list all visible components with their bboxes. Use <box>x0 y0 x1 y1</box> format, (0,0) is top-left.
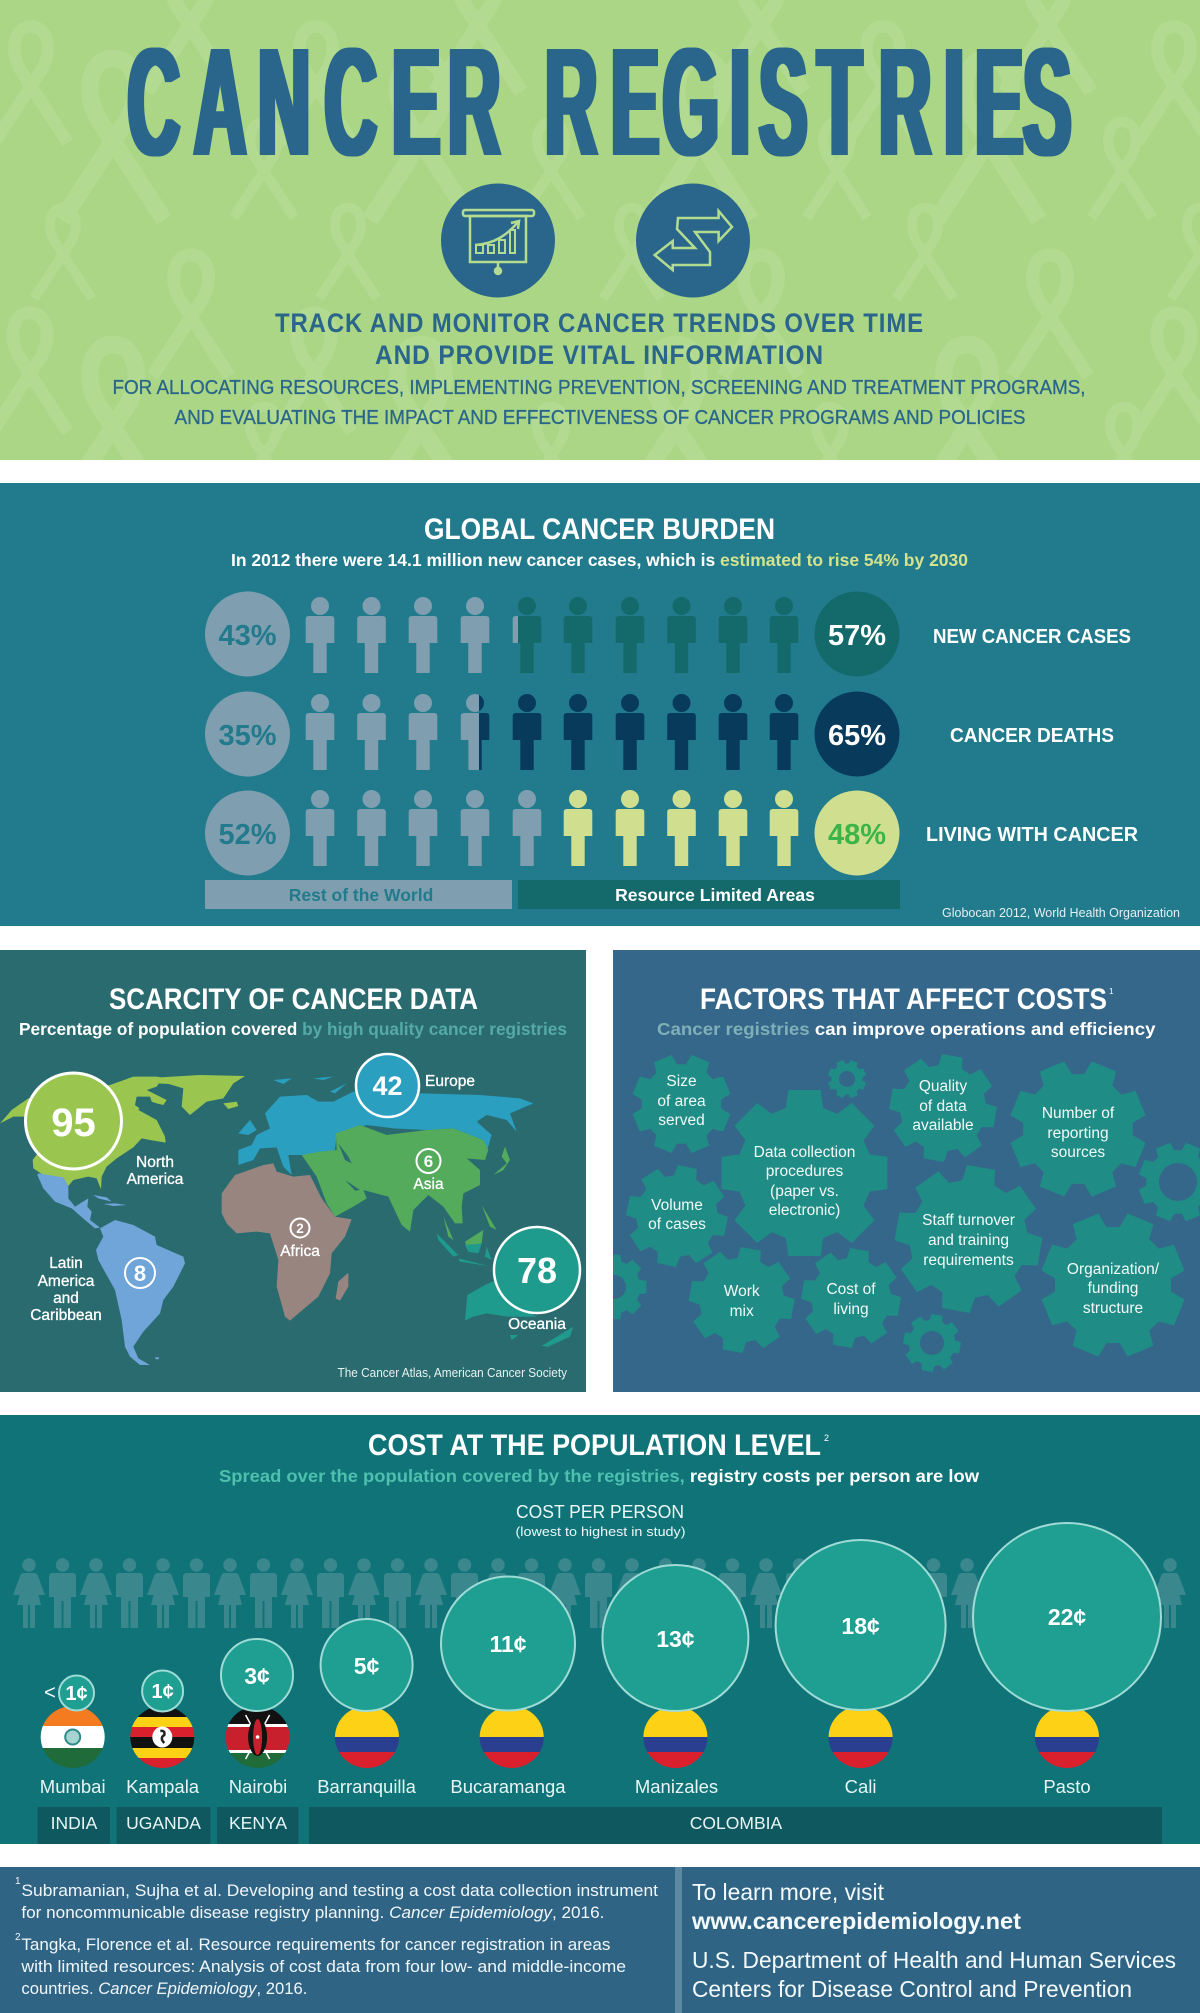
gear label: data collection procedures: procedures <box>766 1163 844 1180</box>
row: living with cancer: LIVING WITH CANCER <box>926 824 1139 846</box>
gear label: organization funding structure: funding <box>1088 1280 1138 1297</box>
bubble: manizales 13 cents <box>602 1565 748 1711</box>
row: new cancer cases: 43% <box>218 620 277 652</box>
bubble: north america 95: 95 <box>51 1101 96 1145</box>
heading: SCARCITY OF CANCER DATA <box>109 983 478 1016</box>
website: www.cancerepidemiology.net <box>691 1908 1021 1934</box>
city labels: Barranquilla <box>317 1776 417 1797</box>
gear label: number of reporting sources <box>1042 1105 1115 1161</box>
map: asia <box>302 1125 510 1247</box>
row: living with cancer: 48% <box>828 819 886 851</box>
bubble: latin america 8: 8 <box>134 1261 146 1286</box>
bubble: asia 6: Asia <box>413 1176 444 1193</box>
agency <box>692 1947 1176 2002</box>
flag: colombia, barranquilla <box>335 1710 399 1768</box>
gear label: quality of data available: of data <box>919 1098 967 1115</box>
legend: resource limited areas: Resource Limited Areas <box>615 885 815 905</box>
bubble: africa 2: Africa <box>280 1243 320 1260</box>
map: north america <box>0 1075 245 1189</box>
bubble: latin america 8 <box>30 1255 155 1324</box>
subheading: In 2012 there were 14.1 million new cancer cases, which is estimated to rise 54% by 2030 <box>231 550 968 570</box>
city labels: Pasto <box>1043 1776 1091 1797</box>
gear label: size of area served: of area <box>657 1093 706 1110</box>
country bar: colombia <box>309 1807 1162 1844</box>
gear label: volume of cases: of cases <box>648 1216 706 1233</box>
map: africa <box>222 1163 352 1321</box>
gear label: staff turnover: Staff turnover <box>922 1212 1015 1229</box>
bubble: asia 6: 6 <box>424 1152 433 1171</box>
row: living with cancer <box>205 790 1139 876</box>
bubble: barranquilla 5 cents: 5¢ <box>354 1653 380 1679</box>
country bar: kenya <box>217 1807 298 1844</box>
gear label: number of reporting sources: sources <box>1051 1144 1105 1161</box>
row: cancer deaths: 35% <box>218 720 277 752</box>
bubble: nairobi 3 cents <box>221 1639 293 1711</box>
bubble: asia 6 <box>413 1149 444 1193</box>
gear label: organization funding structure: structure <box>1083 1300 1143 1317</box>
flag: colombia, cali <box>828 1710 893 1768</box>
panel: cost at the population level <box>0 1415 1200 1844</box>
footnote marker: 1 <box>1109 987 1114 996</box>
gear label: staff turnover: requirements <box>923 1252 1014 1269</box>
bubble: africa 2: 2 <box>296 1221 304 1236</box>
world map: americas <box>0 1075 245 1365</box>
headline: AND PROVIDE VITAL INFORMATION <box>375 340 824 370</box>
gear label: size of area served: served <box>658 1112 705 1129</box>
row: cancer deaths: 65% <box>828 720 886 752</box>
gear label: data collection procedures: Data collection <box>754 1144 855 1161</box>
city labels: Kampala <box>126 1776 200 1797</box>
panel: footer references <box>0 1867 675 2013</box>
panel: footer contact: To learn more, visit <box>692 1879 885 1905</box>
bubble: latin america 8: America <box>38 1273 95 1290</box>
bubble: kampala 1 cent: 1¢ <box>151 1681 174 1703</box>
country bar: india <box>38 1807 110 1844</box>
bubble: europe 42: Europe <box>425 1073 475 1090</box>
bubble: latin america 8: Latin <box>49 1255 83 1272</box>
country bar: uganda <box>117 1807 210 1844</box>
gear label: number of reporting sources: reporting <box>1047 1125 1109 1142</box>
city labels: Bucaramanga <box>450 1776 566 1797</box>
bubble: oceania 78 <box>494 1227 580 1333</box>
bubble: africa 2 <box>280 1218 320 1260</box>
gear label: work mix: Work <box>724 1283 760 1300</box>
panel: factors that affect costs <box>582 950 1200 1392</box>
city labels: Mumbai <box>40 1776 106 1797</box>
bubble: oceania 78: Oceania <box>508 1316 566 1333</box>
panel: scarcity of cancer data <box>0 950 586 1392</box>
population silhouettes <box>13 1558 1186 1628</box>
bubble: mumbai less than 1 cent: 1¢ <box>65 1683 88 1705</box>
gear label: data collection procedures: (paper vs. <box>770 1183 839 1200</box>
chart label: COST PER PERSON <box>516 1501 684 1522</box>
bubble: cali 18 cents <box>776 1540 946 1710</box>
header description <box>112 377 1086 429</box>
bubble: bucaramanga 11 cents: 11¢ <box>489 1631 527 1657</box>
bubble: pasto 22 cents: 22¢ <box>1048 1604 1086 1630</box>
gear label: size of area served: Size <box>666 1073 697 1090</box>
chart label: (lowest to highest in study) <box>516 1524 686 1539</box>
map: oceania <box>437 1233 573 1347</box>
gear label: staff turnover: and training <box>928 1232 1009 1249</box>
icon: presentation chart <box>441 184 555 298</box>
subheading: Cancer registries can improve operations and efficiency <box>657 1019 1156 1039</box>
ribbon background pattern <box>0 0 1200 506</box>
bubble: north america 95: North <box>136 1154 174 1171</box>
reference 2 <box>15 1932 626 1998</box>
reference 1 <box>15 1876 658 1922</box>
agency: U.S. Department of Health and Human Services <box>692 1947 1176 1973</box>
headline: TRACK AND MONITOR CANCER TRENDS OVER TIME <box>275 308 924 338</box>
header description: AND EVALUATING THE IMPACT AND EFFECTIVENESS OF CANCER PROGRAMS AND POLICIES <box>174 407 1026 429</box>
subheading: Percentage of population covered by high quality cancer registries <box>19 1019 567 1039</box>
gear label: volume of cases: Volume <box>651 1197 703 1214</box>
flag: colombia, bucaramanga <box>479 1705 545 1769</box>
country bar: uganda: UGANDA <box>126 1813 201 1833</box>
gear label: quality of data available <box>912 1078 974 1134</box>
gear label: quality of data available: available <box>912 1117 974 1134</box>
footnote marker: 2 <box>824 1433 829 1443</box>
bubble: bucaramanga 11 cents <box>441 1576 575 1710</box>
gear label: quality of data available: Quality <box>919 1078 967 1095</box>
bubble: latin america 8: Caribbean <box>30 1307 102 1324</box>
bubble: mumbai less than 1 cent: < <box>44 1682 56 1704</box>
bubble: mumbai less than 1 cent <box>44 1676 94 1710</box>
flag: uganda <box>129 1705 195 1769</box>
heading: FACTORS THAT AFFECT COSTS <box>700 983 1107 1016</box>
header description: FOR ALLOCATING RESOURCES, IMPLEMENTING PREVENTION, SCREENING AND TREATMENT PROGRAMS, <box>112 377 1086 399</box>
bubble: oceania 78: 78 <box>517 1250 557 1291</box>
bubble: pasto 22 cents <box>973 1523 1161 1711</box>
bubble: manizales 13 cents: 13¢ <box>656 1626 695 1652</box>
gear label: volume of cases <box>648 1197 706 1233</box>
map: latin america <box>37 1173 185 1365</box>
bubble: north america 95: America <box>127 1171 184 1188</box>
gear label: size of area served <box>657 1073 706 1129</box>
row: cancer deaths <box>205 692 1114 776</box>
reference 1: for noncommunicable disease registry planning. Cancer Epidemiology , 2016. <box>21 1904 604 1922</box>
bubble: cali 18 cents: 18¢ <box>841 1613 880 1639</box>
gear label: cost of living: living <box>833 1301 869 1318</box>
flag: colombia, pasto <box>1035 1710 1099 1768</box>
row: cancer deaths: CANCER DEATHS <box>950 725 1114 747</box>
reference 2: 2 <box>15 1932 21 1943</box>
bubble: kampala 1 cent <box>142 1670 183 1712</box>
source: Globocan 2012, World Health Organization <box>942 905 1180 920</box>
gears <box>613 1054 1200 1372</box>
legend: resource limited areas <box>518 880 900 909</box>
country bar: kenya: KENYA <box>229 1813 287 1833</box>
reference 2: with limited resources: Analysis of cost data from four low- and middle-income <box>20 1958 626 1976</box>
title: CANCER <box>128 17 500 188</box>
reference 2: countries. Cancer Epidemiology, 2016. <box>21 1980 307 1998</box>
heading: COST AT THE POPULATION LEVEL <box>368 1429 821 1462</box>
reference 1: 1 <box>15 1876 21 1887</box>
city labels <box>40 1776 1091 1797</box>
source: The Cancer Atlas, American Cancer Society <box>338 1365 567 1380</box>
panel: footer contact <box>675 1867 1200 2013</box>
reference 2: Tangka, Florence et al. Resource requirements for cancer registration in areas <box>21 1936 610 1954</box>
row: new cancer cases: 57% <box>828 620 886 652</box>
heading: GLOBAL CANCER BURDEN <box>424 513 775 546</box>
icon: exchange arrows <box>636 184 750 298</box>
country bar: india: INDIA <box>51 1813 98 1833</box>
legend: rest of the world: Rest of the World <box>289 885 433 905</box>
agency: Centers for Disease Control and Prevention <box>692 1976 1132 2002</box>
reference 1: Subramanian, Sujha et al. Developing and testing a cost data collection instrument <box>21 1882 658 1900</box>
country bar: colombia: COLOMBIA <box>690 1813 783 1833</box>
headline <box>275 308 924 370</box>
gear label: work mix <box>724 1283 760 1320</box>
gear label: data collection procedures <box>754 1144 855 1219</box>
city labels: Nairobi <box>229 1776 287 1797</box>
panel: global cancer burden <box>0 483 1200 926</box>
gear label: data collection procedures: electronic) <box>769 1202 840 1219</box>
bubble: nairobi 3 cents: 3¢ <box>244 1663 270 1689</box>
panel: header <box>0 0 1200 506</box>
bubble: barranquilla 5 cents <box>321 1619 413 1711</box>
gear label: staff turnover <box>922 1212 1015 1269</box>
bubble: europe 42: 42 <box>372 1071 403 1101</box>
title <box>128 17 1071 188</box>
flag: colombia, manizales <box>643 1710 708 1768</box>
city labels: Cali <box>845 1776 877 1797</box>
world map: eastern hemisphere <box>222 1077 573 1347</box>
map: europe <box>238 1077 533 1175</box>
gear label: organization funding structure <box>1067 1261 1160 1317</box>
gear label: work mix: mix <box>730 1303 754 1320</box>
title: REGISTRIES <box>545 17 1071 188</box>
gear label: number of reporting sources: Number of <box>1042 1105 1115 1122</box>
bubble: latin america 8: and <box>53 1290 79 1307</box>
subheading: Spread over the population covered by the registries, registry costs per person are low <box>219 1466 979 1486</box>
flag: kenya <box>225 1705 291 1769</box>
chart label <box>516 1501 686 1539</box>
gear label: cost of living <box>826 1281 876 1318</box>
row: new cancer cases <box>205 592 1131 676</box>
row: new cancer cases: NEW CANCER CASES <box>933 626 1131 648</box>
gear label: organization funding structure: Organization/ <box>1067 1261 1160 1278</box>
row: living with cancer: 52% <box>218 819 277 851</box>
flag: india <box>40 1705 106 1769</box>
bubble: north america 95 <box>26 1073 184 1188</box>
city labels: Manizales <box>635 1776 718 1797</box>
legend: rest of the world <box>205 880 512 909</box>
gear label: cost of living: Cost of <box>826 1281 876 1298</box>
bubble: europe 42 <box>356 1054 475 1117</box>
